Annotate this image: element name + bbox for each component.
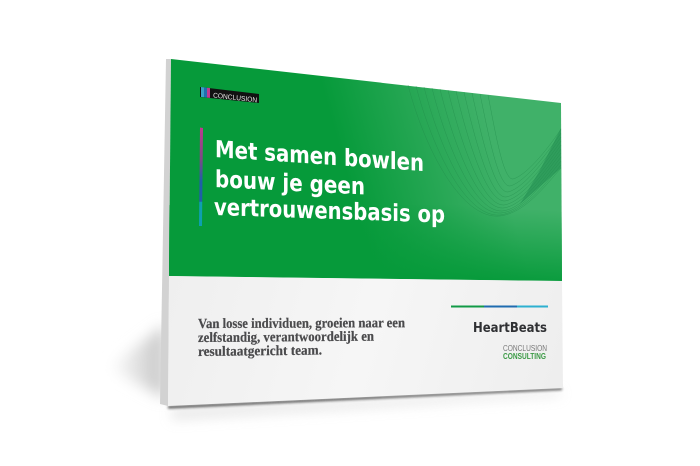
logo: Conclusion Consulting: [503, 344, 547, 361]
logo: Conclusion Consulting: CONCLUSION: [503, 344, 547, 353]
title: bouw je geen: [215, 165, 365, 200]
subtitle: Van losse individuen, groeien naar een: [198, 316, 405, 332]
title: Met samen bowlen: [215, 135, 424, 177]
subtitle: [198, 316, 405, 360]
page edge: [160, 59, 171, 406]
booklet cover: [160, 59, 563, 406]
subtitle: resultaatgericht team.: [198, 344, 322, 360]
wave line pattern: [408, 85, 561, 216]
logo: HeartBeats: HeartBeats: [473, 320, 547, 336]
title: vertrouwensbasis op: [214, 193, 445, 229]
logo: Conclusion tag: CONCLUSION: [213, 93, 257, 104]
panel: green cover top: [169, 59, 562, 281]
subtitle: zelfstandig, verantwoordelijk en: [198, 330, 374, 346]
accent bar: [199, 128, 203, 226]
title: [214, 135, 445, 229]
panel: white lower cover: [168, 276, 563, 406]
logo: Conclusion tag: [200, 87, 259, 104]
logo: Conclusion Consulting: CONSULTING: [503, 352, 546, 361]
tricolour rule: [451, 306, 548, 308]
cast shadow: [108, 325, 562, 420]
